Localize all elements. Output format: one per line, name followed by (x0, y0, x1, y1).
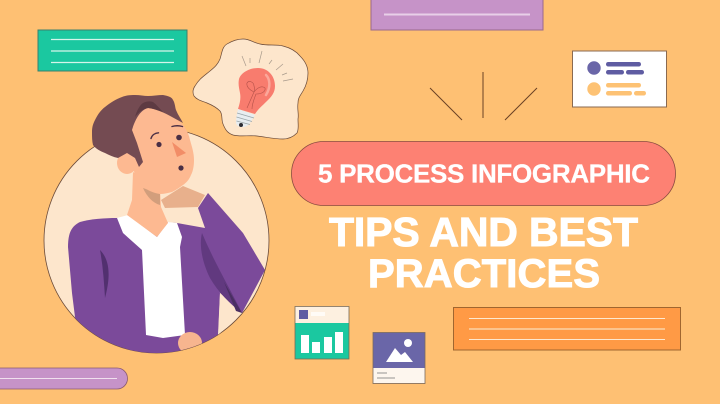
jacket (68, 218, 220, 353)
title: PRACTICES (368, 252, 600, 296)
icon: bulb filament (247, 82, 265, 109)
panel: purple bottom pill (0, 368, 128, 389)
icon: thought bubble with light bulb (193, 39, 308, 139)
title (329, 209, 638, 296)
hair (92, 95, 183, 167)
arrow: burst lines above title (430, 72, 537, 120)
neck (127, 172, 168, 237)
hair shadow (135, 101, 163, 117)
head (132, 108, 194, 194)
panel: orange note card (454, 308, 680, 350)
hand at chin (161, 186, 205, 208)
panel: purple top card (371, 0, 543, 30)
ear (117, 152, 137, 174)
heading: pill text: 5 PROCESS INFOGRAPHIC (318, 158, 650, 188)
panel: profile list card (572, 51, 666, 107)
panel: title pill (292, 142, 676, 206)
title: TIPS AND BEST (329, 209, 638, 255)
sleeve (198, 193, 265, 313)
eyes, brows, nose and mouth (151, 126, 186, 171)
chin shadow (143, 188, 160, 205)
hand bottom (178, 332, 202, 350)
icon: image card (373, 332, 425, 384)
icon: bulb glass (238, 68, 275, 114)
panel: character circle (44, 95, 269, 370)
shirt (117, 215, 185, 338)
panel: green note card (38, 30, 187, 71)
icon: bulb screw base (236, 109, 255, 127)
icon: bar chart card (295, 306, 349, 359)
